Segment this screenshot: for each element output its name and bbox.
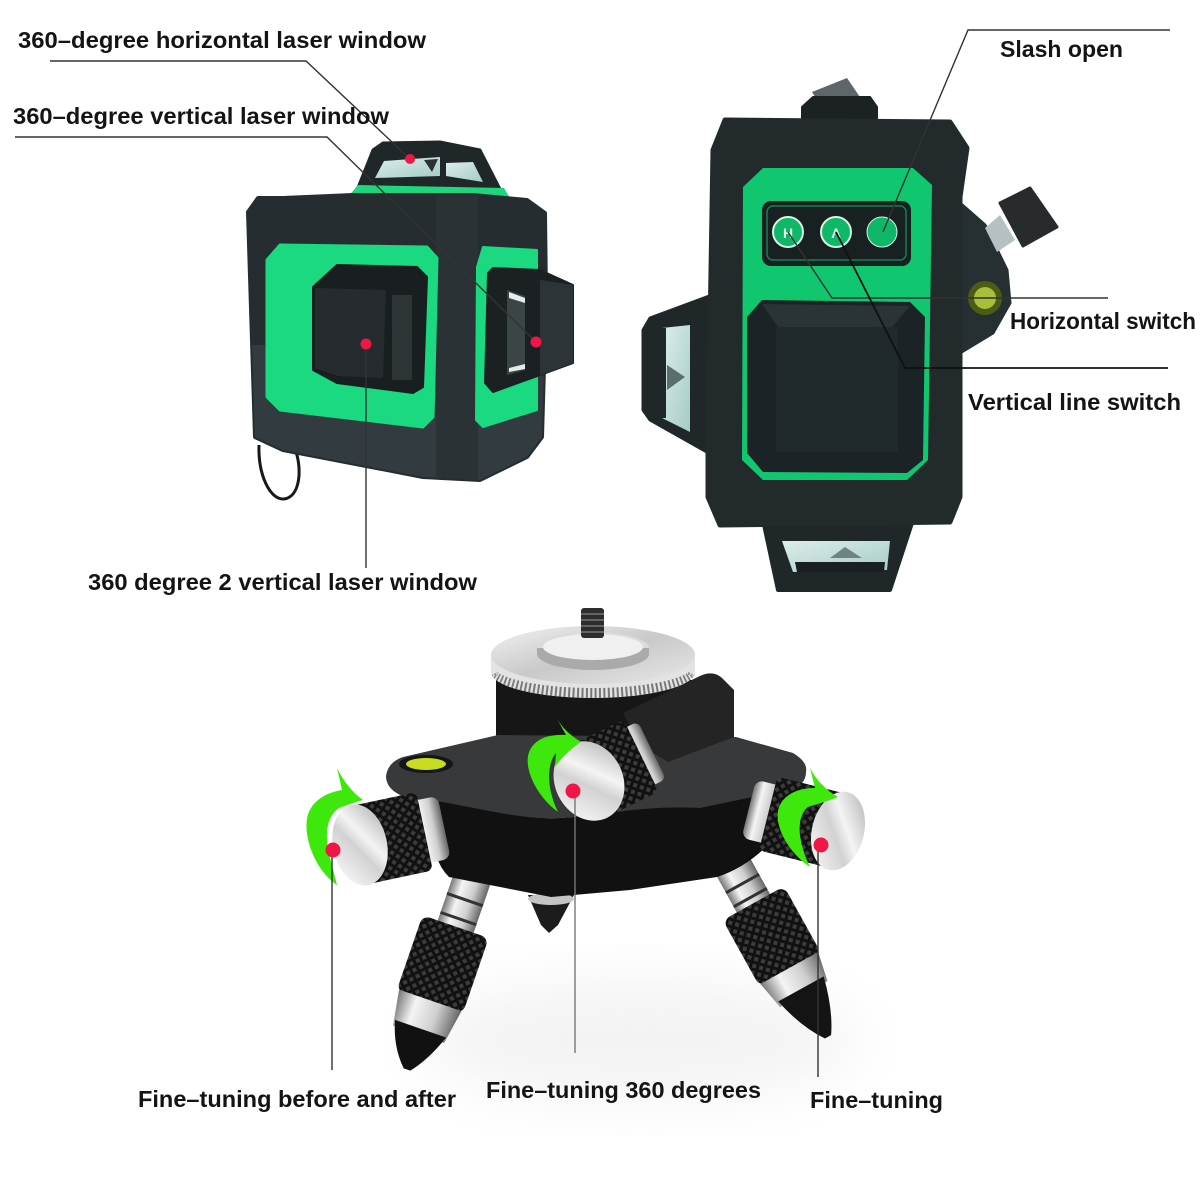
green rotation arrow right	[778, 768, 838, 867]
label: 360 degree 2 vertical laser window: 360 degree 2 vertical laser window	[88, 569, 477, 595]
right adjustment mount	[960, 188, 1057, 353]
bubble level	[399, 755, 453, 773]
large dark window	[747, 300, 925, 473]
black lower body	[430, 795, 768, 897]
base plate	[386, 735, 806, 818]
soft ground shadow	[420, 980, 860, 1100]
center knob	[540, 713, 670, 833]
top clip	[802, 78, 877, 125]
button H	[773, 217, 803, 247]
green rotation arrow left	[306, 768, 363, 885]
center screw	[581, 608, 604, 638]
right leg	[701, 846, 858, 1054]
rear green panel	[742, 168, 932, 480]
label: 360-degree horizontal laser window: 360–degree horizontal laser window	[18, 27, 426, 53]
front laser window block	[313, 265, 427, 393]
left leg	[373, 866, 506, 1081]
laser level: rear button view	[643, 78, 1057, 590]
left side window	[643, 295, 712, 455]
label: slash open: Slash open	[1000, 36, 1123, 62]
housing lower band	[252, 345, 544, 480]
green side panel left	[267, 245, 437, 427]
red marker dots	[326, 154, 828, 858]
arm housing	[623, 673, 734, 762]
side laser window block	[485, 268, 573, 392]
lanyard loop	[259, 445, 299, 499]
label: fine-tuning: Fine–tuning	[810, 1087, 943, 1113]
bottom window	[763, 520, 913, 590]
center rear foot	[528, 893, 574, 933]
label: fine-tuning before and after: Fine–tuning before and after	[138, 1086, 456, 1112]
top laser turret	[347, 142, 510, 198]
button panel	[762, 201, 911, 266]
housing	[248, 195, 546, 480]
label: horizontal switch: Horizontal switch	[1010, 308, 1196, 334]
tripod base adjuster	[306, 608, 873, 1100]
laser level: front corner view	[240, 142, 573, 499]
green rotation arrow center	[528, 717, 581, 812]
label: 360-degree vertical laser window: 360–degree vertical laser window	[13, 103, 389, 129]
rear housing	[708, 120, 967, 525]
button V: Λ	[831, 225, 841, 241]
top silver disk with knurled edge	[485, 626, 701, 701]
label: vertical line switch: Vertical line switch	[968, 389, 1181, 415]
right knob	[739, 770, 873, 876]
button V	[821, 217, 851, 247]
label: fine-tuning 360 degrees: Fine–tuning 360 degrees	[486, 1077, 761, 1103]
button H: H	[783, 225, 793, 241]
button slash	[867, 217, 897, 247]
black cylinder	[496, 680, 700, 775]
green side panel right	[476, 247, 537, 427]
left knob	[325, 787, 453, 891]
